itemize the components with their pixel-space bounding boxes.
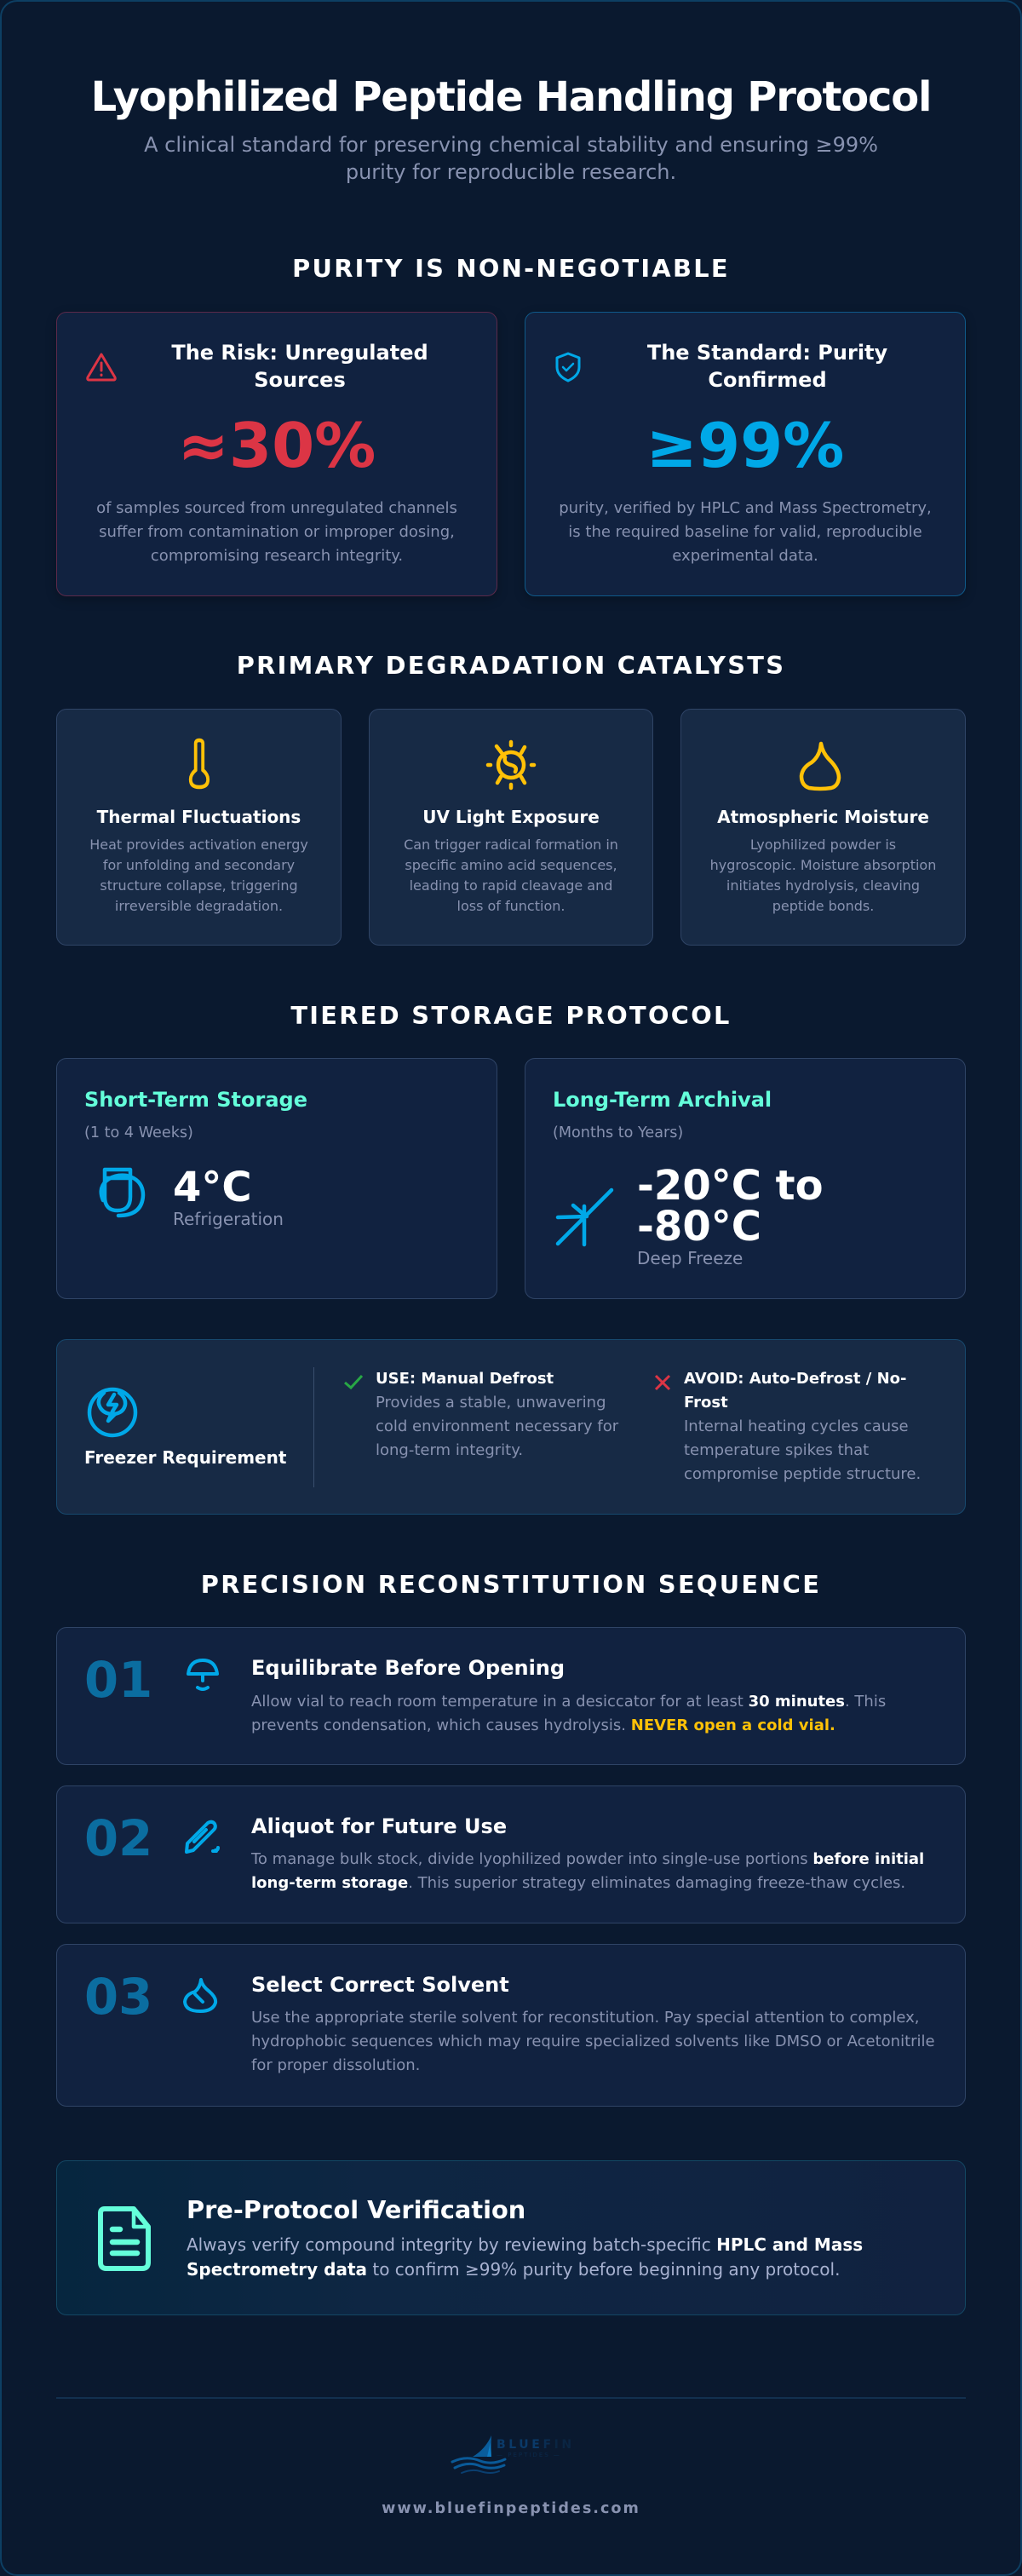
step 2 text: long-term storage. This superior strategy eliminates damaging freeze-thaw cycles. <box>251 1874 905 1892</box>
standard description: experimental data. <box>672 547 818 565</box>
step 3 text: Use the appropriate sterile solvent for reconstitution. Pay special attention to complex, <box>251 2009 920 2027</box>
icon: snowflake <box>555 1187 613 1247</box>
divider <box>313 1367 314 1487</box>
heading: catalysts: PRIMARY DEGRADATION CATALYSTS <box>237 651 785 680</box>
thermal text: for unfolding and secondary <box>103 857 295 873</box>
short-term mode: Refrigeration <box>173 1209 284 1229</box>
uv text: leading to rapid cleavage and <box>410 877 612 894</box>
panel: freezer requirement <box>56 1339 966 1515</box>
thermal text: structure collapse, triggering <box>100 877 298 894</box>
standard description: is the required baseline for valid, reproducible <box>568 523 922 541</box>
step number 02: 02 <box>84 1810 152 1867</box>
risk description: compromising research integrity. <box>151 547 403 565</box>
avoid text: compromise peptide structure. <box>684 1465 921 1483</box>
long-term mode: Deep Freeze <box>637 1248 743 1268</box>
uv text: Can trigger radical formation in <box>404 837 618 853</box>
step 3 title: Select Correct Solvent <box>251 1973 509 1997</box>
subtitle: A clinical standard for preserving chemical stability and ensuring ≥99% <box>144 133 878 157</box>
uv text: loss of function. <box>457 898 565 914</box>
icon: thermometer <box>189 738 210 789</box>
uv title: UV Light Exposure <box>422 807 600 827</box>
avoid text <box>684 1370 921 1483</box>
standard description: purity, verified by HPLC and Mass Spectrometry, <box>559 499 932 517</box>
logo sub-wordmark: — PEPTIDES — <box>497 2452 561 2458</box>
moisture text: initiates hydrolysis, cleaving <box>726 877 920 894</box>
panel: long-term archival <box>525 1058 966 1299</box>
panel: pre-protocol verification <box>56 2160 966 2315</box>
icon: solvent drop <box>183 1978 218 2013</box>
step 2 text: To manage bulk stock, divide lyophilized powder into single-use portions before initial <box>251 1850 924 1868</box>
avoid text: temperature spikes that <box>684 1441 869 1459</box>
panel: step 1 <box>56 1627 966 1765</box>
long-term duration: (Months to Years) <box>553 1124 683 1141</box>
icon: umbrella <box>187 1659 219 1691</box>
risk stat: ≈30% <box>178 410 376 481</box>
short-term duration: (1 to 4 Weeks) <box>84 1124 193 1141</box>
step 3 text: for proper dissolution. <box>251 2056 420 2074</box>
risk heading: The Risk: Unregulated <box>171 341 428 365</box>
icon: pipette <box>185 1820 220 1854</box>
logo wordmark: BLUEFIN <box>497 2438 575 2452</box>
icon: shield check <box>555 353 581 382</box>
avoid text: Internal heating cycles cause <box>684 1417 909 1435</box>
risk description: suffer from contamination or improper dosing, <box>99 523 455 541</box>
avoid text: Frost <box>684 1394 728 1412</box>
long-term title: Long-Term Archival <box>553 1088 772 1112</box>
panel: uv <box>369 709 653 946</box>
freezer label: Freezer Requirement <box>84 1447 286 1468</box>
heading: purity: PURITY IS NON-NEGOTIABLE <box>292 254 730 283</box>
thermal text: irreversible degradation. <box>115 898 283 914</box>
risk description: of samples sourced from unregulated channels <box>96 499 457 517</box>
risk heading: Sources <box>254 368 346 392</box>
heading: reconstitution: PRECISION RECONSTITUTION SEQUENCE <box>201 1570 821 1599</box>
logo mark <box>451 2435 506 2474</box>
thermal text <box>89 837 308 914</box>
uv text: specific amino acid sequences, <box>405 857 617 873</box>
step 3 text: hydrophobic sequences which may require specialized solvents like DMSO or Acetonitrile <box>251 2033 935 2050</box>
standard description <box>559 499 932 565</box>
step 2 title: Aliquot for Future Use <box>251 1814 507 1838</box>
panel: step 3 <box>56 1944 966 2107</box>
subtitle <box>144 133 878 184</box>
verification text: Spectrometry data to confirm ≥99% purity before beginning any protocol. <box>187 2259 840 2280</box>
icon: freezer bolt <box>87 1387 138 1438</box>
panel: moisture <box>680 709 966 946</box>
step 1 text: Allow vial to reach room temperature in a desiccator for at least 30 minutes. This <box>251 1693 886 1711</box>
use text: long-term integrity. <box>376 1441 523 1459</box>
step 1 title: Equilibrate Before Opening <box>251 1656 565 1680</box>
step 1 text <box>251 1693 886 1734</box>
use: manual defrost <box>344 1370 618 1459</box>
moisture title: Atmospheric Moisture <box>717 807 929 827</box>
panel: short-term storage <box>56 1058 497 1299</box>
moisture text: Lyophilized powder is <box>750 837 896 853</box>
use text <box>376 1370 618 1459</box>
long-term temperature <box>637 1162 824 1251</box>
thermal text: Heat provides activation energy <box>89 837 308 853</box>
panel: step 2 <box>56 1785 966 1923</box>
icon: drop <box>799 741 841 791</box>
use text: Provides a stable, unwavering <box>376 1394 606 1412</box>
icon: warning triangle <box>86 353 117 382</box>
verification text: Always verify compound integrity by reviewing batch-specific HPLC and Mass <box>187 2234 863 2255</box>
thermal title: Thermal Fluctuations <box>97 807 301 827</box>
step 2 text <box>250 1850 924 1892</box>
heading: storage: TIERED STORAGE PROTOCOL <box>290 1001 732 1030</box>
title: Lyophilized Peptide Handling Protocol <box>91 73 931 121</box>
icon: document <box>98 2206 151 2271</box>
avoid text: AVOID: Auto-Defrost / No- <box>684 1370 906 1388</box>
logo <box>451 2435 575 2474</box>
step number 03: 03 <box>84 1969 152 2026</box>
standard heading: The Standard: Purity <box>647 341 887 365</box>
risk heading <box>171 341 428 392</box>
moisture text: hygroscopic. Moisture absorption <box>710 857 936 873</box>
icon: vial <box>99 1167 145 1218</box>
moisture text <box>710 837 936 914</box>
step 3 text <box>251 2009 935 2074</box>
use text: USE: Manual Defrost <box>376 1370 554 1388</box>
standard heading: Confirmed <box>708 368 827 392</box>
avoid: auto-defrost <box>655 1370 921 1483</box>
standard stat: ≥99% <box>646 410 844 481</box>
standard heading <box>647 341 887 392</box>
short-term temperature: 4°C <box>173 1164 252 1211</box>
website url: www.bluefinpeptides.com <box>382 2500 640 2517</box>
use text: cold environment necessary for <box>376 1417 618 1435</box>
icon: sun <box>485 739 537 791</box>
step 1 text: prevents condensation, which causes hydrolysis. NEVER open a cold vial. <box>251 1716 835 1734</box>
moisture text: peptide bonds. <box>772 898 874 914</box>
long-term temperature: -20°C to <box>637 1162 824 1210</box>
panel: thermal <box>56 709 342 946</box>
verification title: Pre-Protocol Verification <box>187 2195 525 2224</box>
step number 01: 01 <box>84 1652 152 1709</box>
icon: check <box>344 1375 363 1390</box>
uv text <box>404 837 618 914</box>
icon: cross <box>655 1375 670 1390</box>
footer divider <box>56 2397 966 2399</box>
short-term title: Short-Term Storage <box>84 1088 307 1112</box>
subtitle: purity for reproducible research. <box>346 160 676 184</box>
panel: the standard <box>525 312 966 596</box>
long-term temperature: -80°C <box>637 1203 761 1251</box>
verification text <box>187 2234 863 2280</box>
panel: the risk <box>56 312 497 596</box>
risk description <box>96 499 457 565</box>
